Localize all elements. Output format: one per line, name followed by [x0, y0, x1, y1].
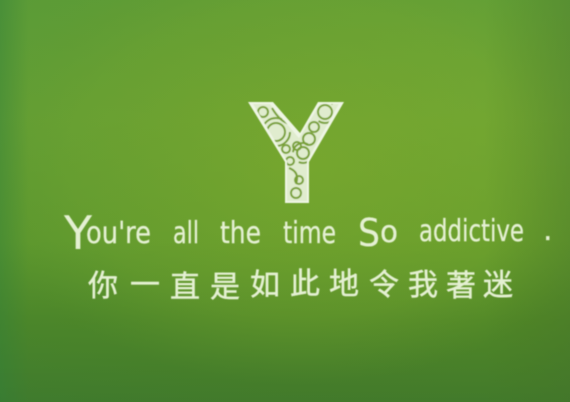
slogan: Chinese line: 我 — [408, 269, 438, 302]
slogan: Chinese line: 一 — [130, 269, 160, 302]
slogan: Chinese line: 令 — [369, 269, 399, 302]
slogan: English line: all — [173, 216, 199, 251]
slogan: English line: Y — [63, 206, 93, 260]
slogan: English line — [63, 206, 553, 260]
slogan: Chinese line: 著 — [446, 270, 476, 303]
slogan: Chinese line: 迷 — [483, 269, 513, 302]
slogan: English line: time — [283, 216, 336, 251]
slogan: English line: S — [358, 211, 380, 255]
slogan: Chinese line: 你 — [88, 270, 118, 303]
slogan: English line: ou're — [86, 216, 151, 251]
slogan: English line: . — [543, 213, 553, 248]
slogan: English line: the — [220, 216, 261, 251]
slogan: Chinese line: 直 — [170, 271, 200, 304]
slogan: English line: addictive — [419, 214, 524, 249]
slogan: Chinese line: 此 — [290, 268, 320, 301]
slogan: Chinese line: 地 — [329, 268, 359, 301]
logo: patterned letter Y — [248, 101, 344, 203]
slogan: Chinese line: 是 — [210, 271, 240, 304]
slogan: Chinese line: 如 — [250, 269, 280, 302]
slogan: English line: o — [380, 215, 398, 250]
slogan: Chinese line — [88, 268, 513, 304]
